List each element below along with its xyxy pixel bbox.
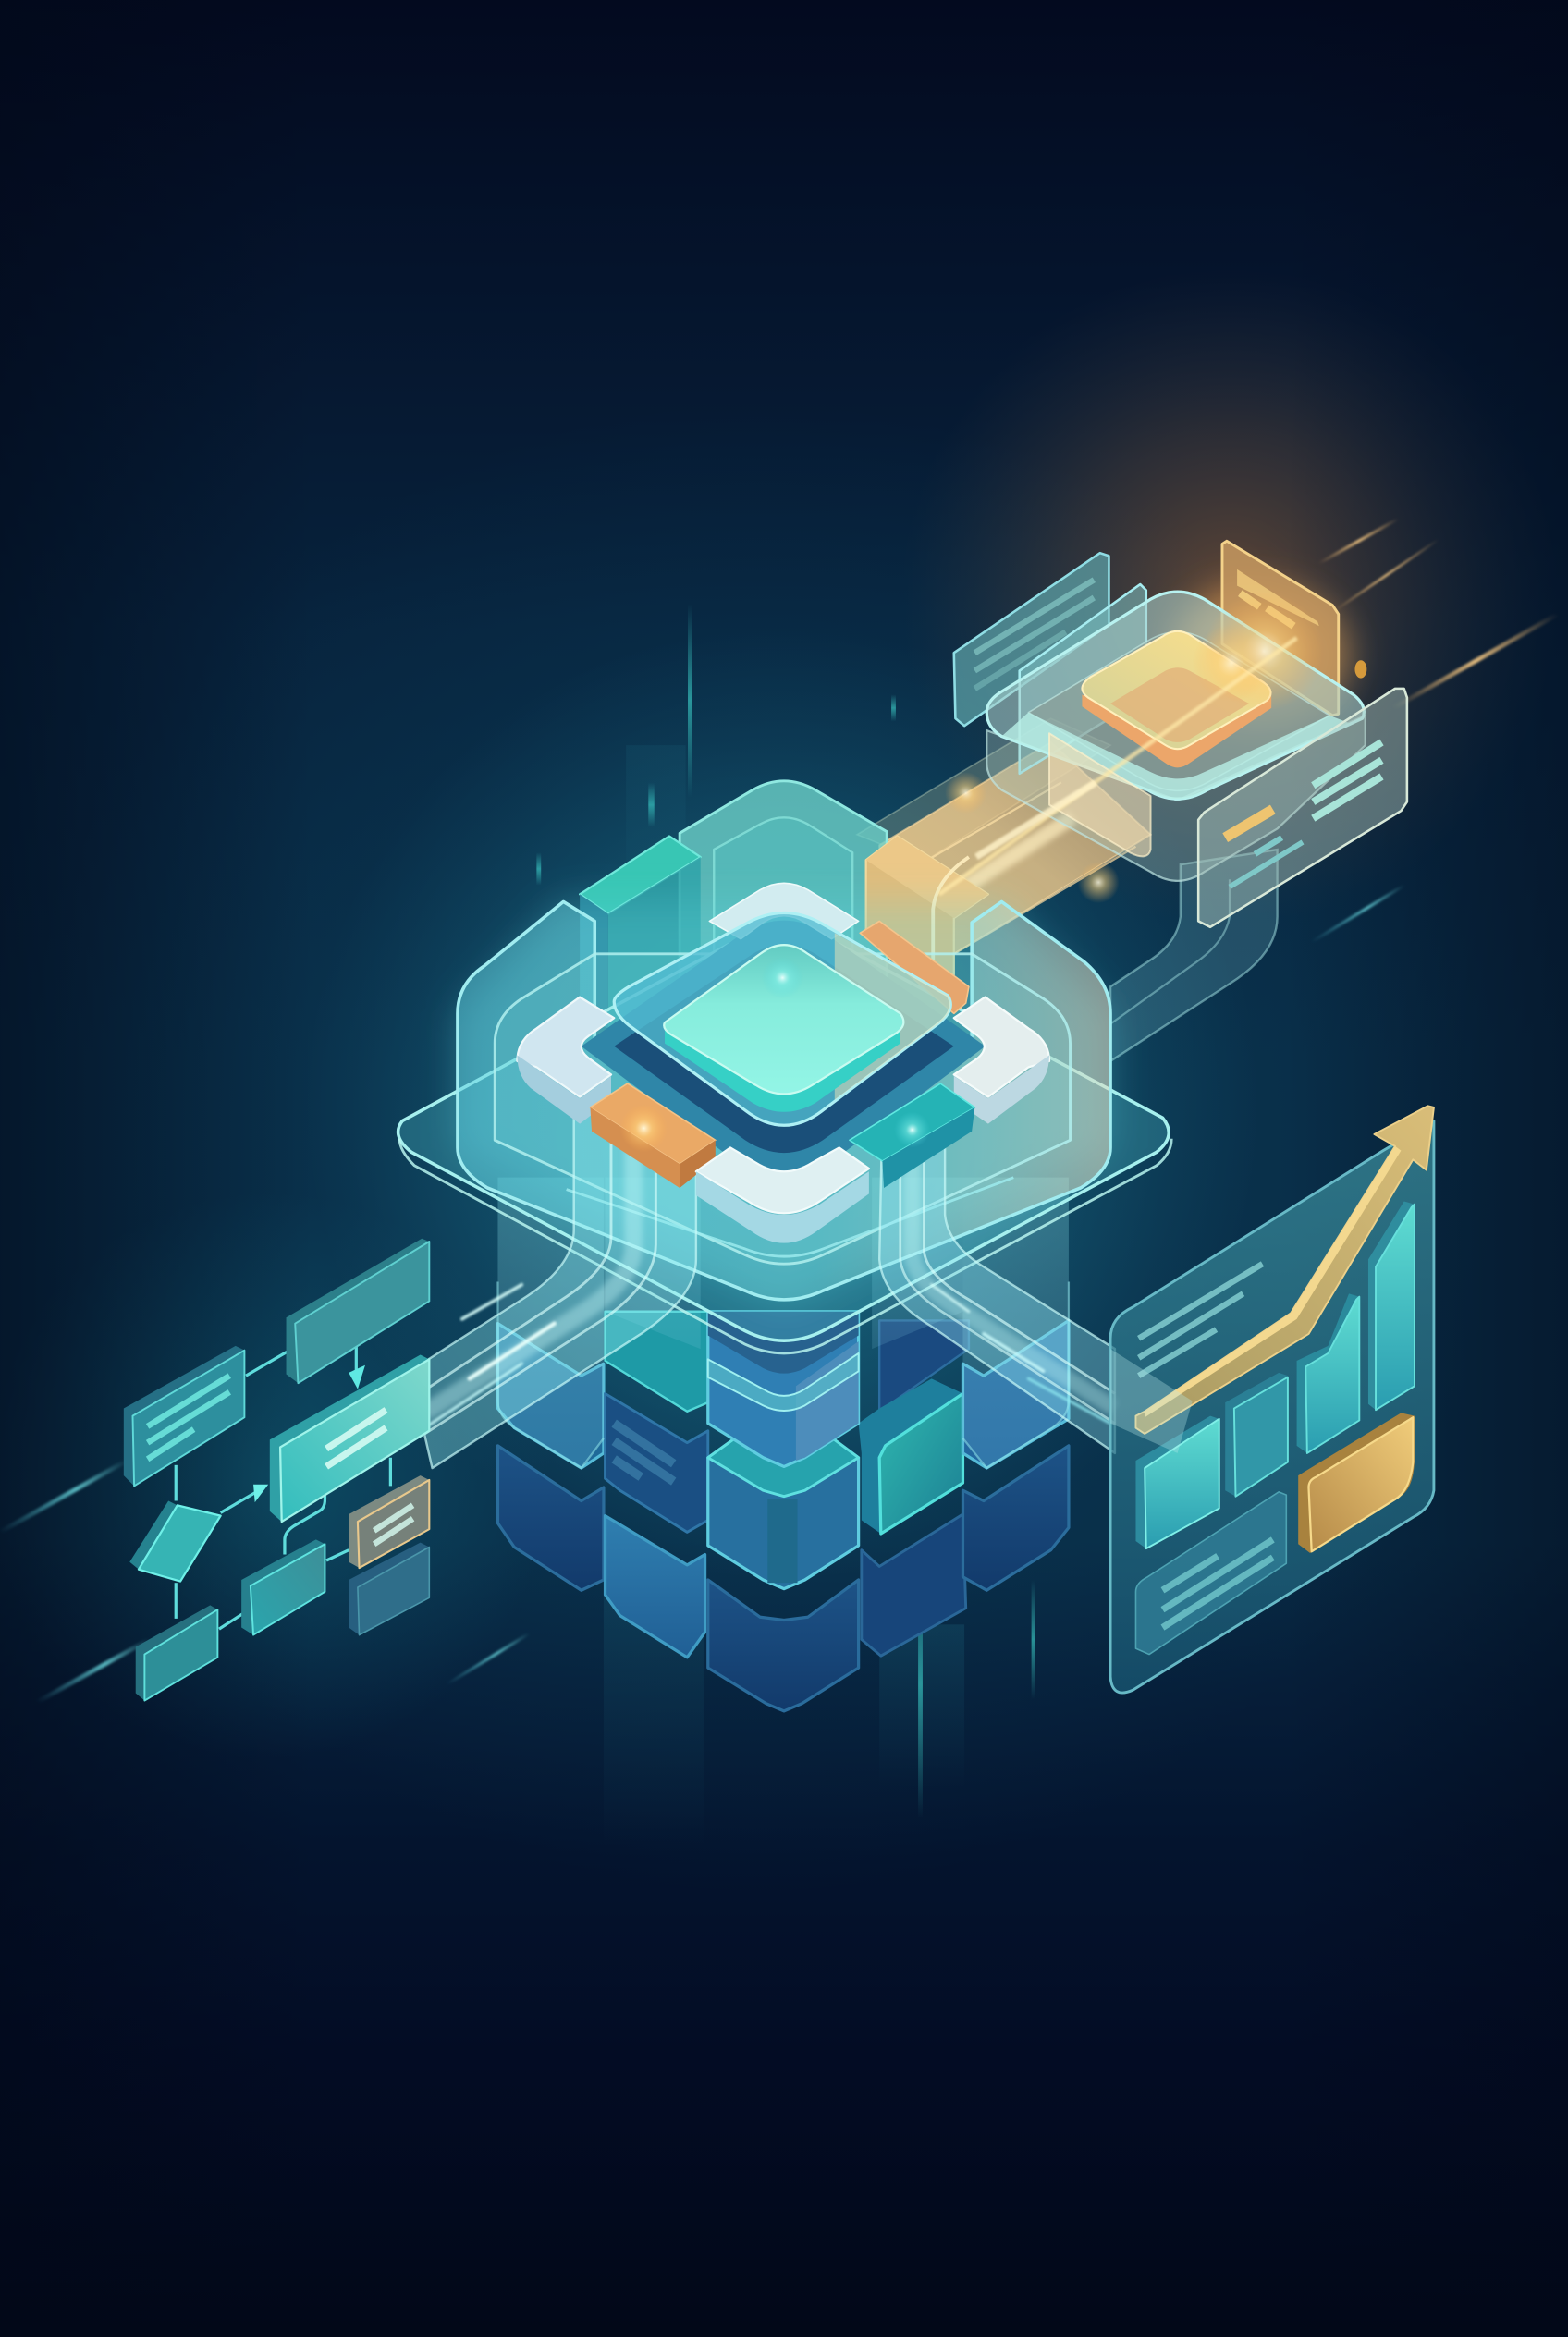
panel: second card (1020, 584, 1146, 774)
cube: far left upper (497, 1324, 604, 1468)
panel: right card (1198, 689, 1407, 927)
corner: right white (954, 997, 1049, 1124)
bar 2 (1225, 1373, 1288, 1497)
box: middle (241, 1539, 325, 1635)
icon: droplet (1354, 660, 1366, 679)
flowchart (124, 1239, 429, 1701)
corner: top light (709, 883, 859, 939)
gold card (1298, 1413, 1415, 1553)
front glass pillar (1049, 733, 1151, 856)
decision shape (129, 1501, 221, 1582)
arrow: down (349, 1365, 365, 1389)
central glass stack (398, 781, 1171, 1468)
vertical light beams (536, 604, 1035, 1848)
cube: center top (708, 1312, 859, 1466)
box: dark (349, 1543, 429, 1635)
block: orange right (860, 921, 969, 1013)
back block: orange (866, 836, 988, 974)
box: bottom (136, 1605, 217, 1701)
panel: left card (954, 553, 1109, 726)
lens flares (939, 592, 1324, 903)
block: teal right (850, 1083, 974, 1188)
bar 3 (1297, 1293, 1359, 1453)
cube: teal right (859, 1378, 962, 1534)
cube: far left lower (497, 1446, 604, 1590)
cube: teal back left (606, 1312, 708, 1412)
glass duct to upper right module (857, 718, 1278, 1061)
box: gold outlined (349, 1475, 429, 1568)
glass column: right inner (872, 1178, 962, 1349)
glass plate (614, 913, 950, 1125)
glass body tier base ring (398, 928, 1171, 1353)
glass column: left inner (606, 1178, 701, 1349)
arrow: right (253, 1485, 268, 1502)
cube: dark upper right (879, 1320, 969, 1412)
box: main (270, 1355, 429, 1522)
tray and shadow (582, 921, 986, 1181)
connectors (176, 1297, 390, 1629)
glass box (986, 592, 1364, 799)
ribbons under blocks (410, 1110, 1115, 1468)
cube: center middle (708, 1416, 859, 1589)
cube: far right upper (962, 1320, 1069, 1468)
corner: left white (517, 997, 614, 1124)
background light streaks (0, 519, 1558, 1702)
corner: bottom white (696, 1147, 869, 1243)
block: orange left (590, 1083, 716, 1188)
text lines (1139, 1264, 1263, 1376)
gold core (1082, 631, 1271, 767)
arrow (1135, 1106, 1434, 1434)
center teal block (664, 945, 903, 1112)
glass box lower volume (986, 716, 1366, 881)
cube grid: data blocks (497, 1178, 1069, 1711)
bar 1 (1135, 1416, 1219, 1548)
chart panel (1110, 1106, 1434, 1693)
panel card (1110, 1120, 1434, 1693)
box: top (287, 1239, 429, 1383)
text card (1135, 1492, 1286, 1655)
panel: yellow card (1222, 541, 1339, 716)
glass column: right outer (962, 1178, 1069, 1468)
glass body outer (458, 901, 1110, 1300)
warm glow behind module (1170, 587, 1349, 725)
cube: center bottom (708, 1580, 859, 1711)
cube: document block (606, 1393, 708, 1532)
ribbon: left (410, 1110, 696, 1468)
back block: teal left (580, 836, 701, 1028)
cube: far right lower (962, 1446, 1069, 1590)
cube: right lower (862, 1514, 966, 1656)
box: text left (124, 1346, 244, 1486)
halo behind glass (458, 901, 1110, 1309)
cube: lower left (606, 1516, 705, 1658)
glass column: left outer (497, 1178, 604, 1468)
upper right module (939, 541, 1407, 927)
ribbon: right (879, 1110, 1115, 1453)
back block: top arch (680, 781, 887, 1028)
bright flow streaks (424, 1285, 1110, 1428)
ribbon overlay on chart (1110, 1349, 1193, 1453)
bar 4 (1368, 1201, 1415, 1410)
